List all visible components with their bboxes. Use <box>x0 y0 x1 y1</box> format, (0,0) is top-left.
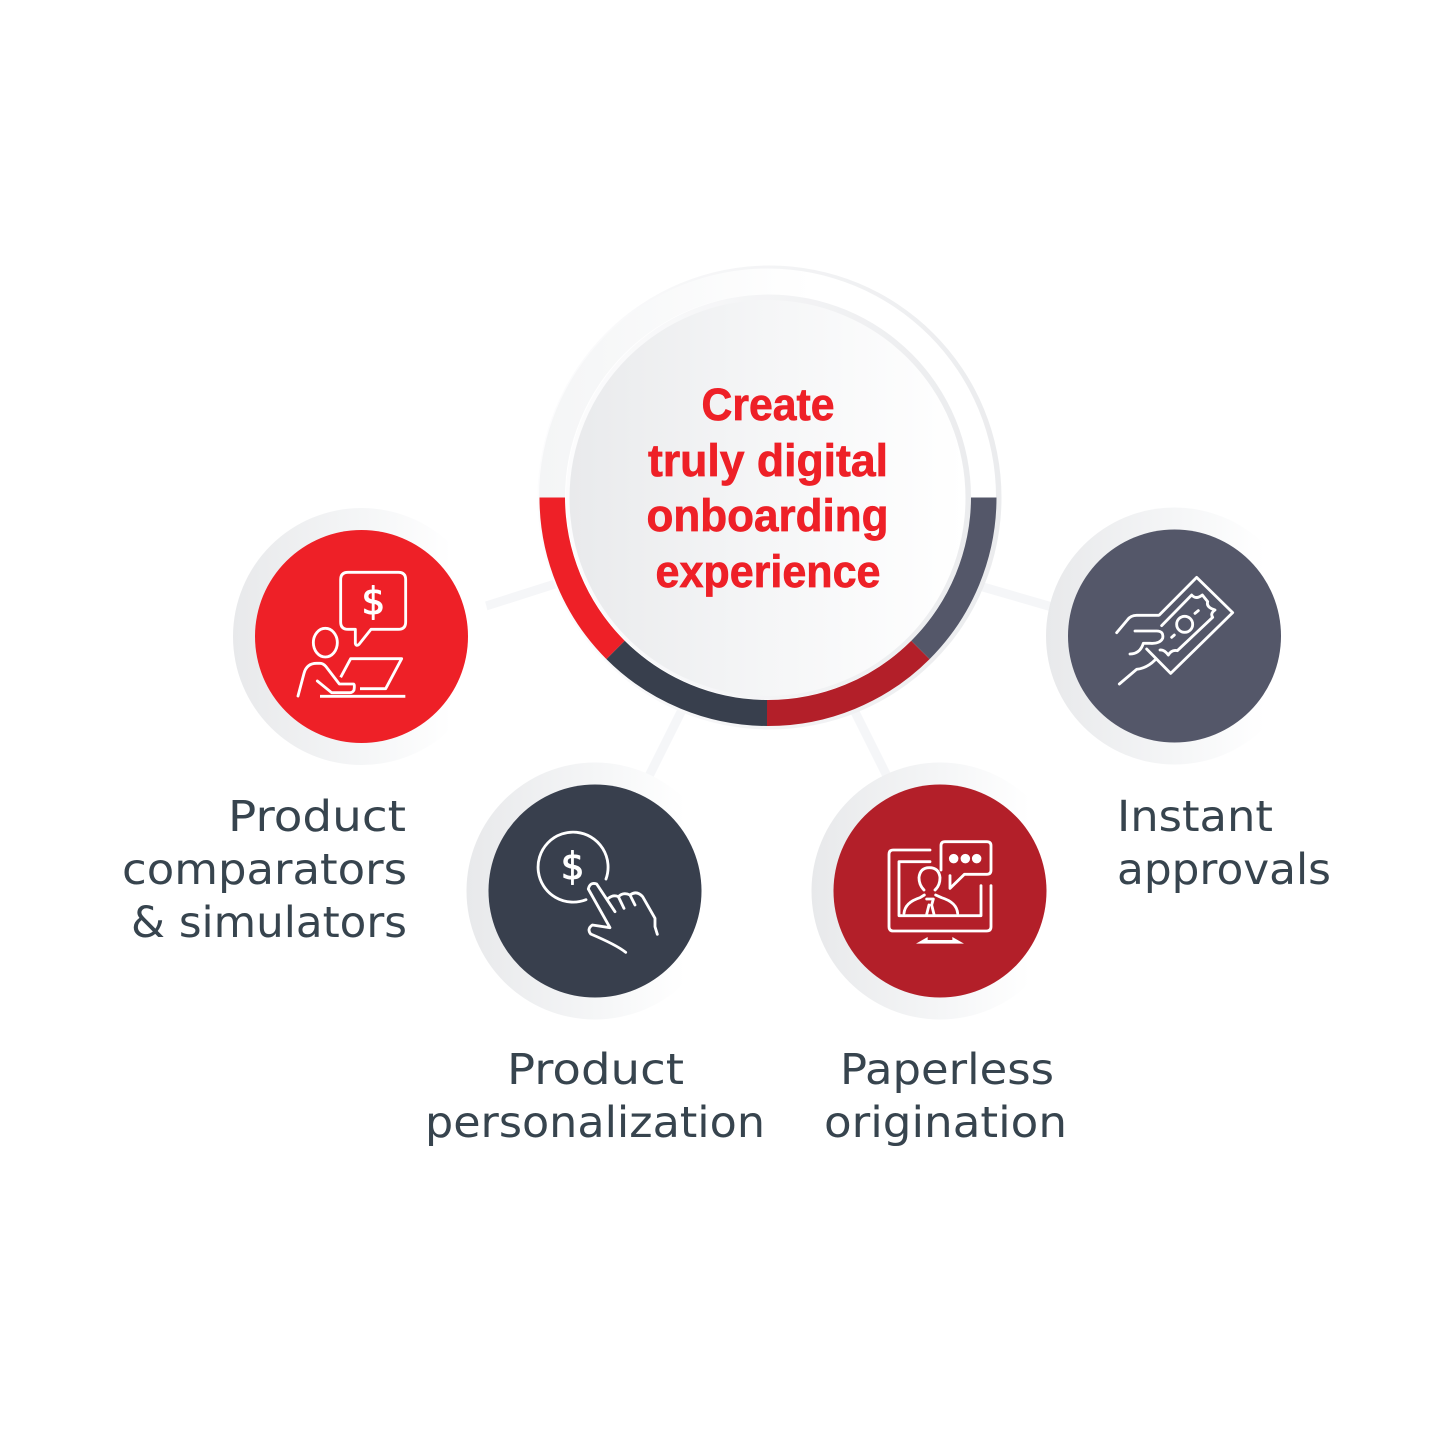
central hub <box>538 266 1002 730</box>
node: product personalization <box>466 762 724 1020</box>
label: product comparators: comparators <box>122 845 407 895</box>
label: product personalization: Product <box>507 1045 684 1095</box>
title: experience <box>656 546 880 597</box>
node: product comparators <box>233 508 490 765</box>
label: product comparators <box>122 792 407 948</box>
title: truly digital <box>648 435 888 486</box>
icon: hand holding banknote <box>1117 577 1233 684</box>
title: Create <box>702 379 834 430</box>
icon: person at laptop with dollar speech bubble: $ <box>361 579 385 623</box>
label: product personalization: personalization <box>425 1098 765 1148</box>
hub ring segments <box>552 498 984 713</box>
node: instant approvals <box>1046 508 1303 764</box>
icon: video call on monitor <box>889 842 991 944</box>
icon: finger tapping dollar coin: $ <box>561 844 585 888</box>
label: product comparators: Product <box>228 792 406 842</box>
label: instant approvals <box>1117 792 1331 895</box>
label: product comparators: & simulators <box>131 898 407 948</box>
connector lines <box>486 584 1052 778</box>
title: onboarding <box>646 490 888 541</box>
label: instant approvals: Instant <box>1117 792 1273 842</box>
node: paperless origination <box>812 762 1068 1020</box>
icon: finger tapping dollar coin <box>538 832 657 952</box>
label: instant approvals: approvals <box>1117 845 1331 895</box>
label: paperless origination: Paperless <box>840 1045 1054 1095</box>
label: paperless origination: origination <box>824 1098 1067 1148</box>
label: paperless origination <box>824 1045 1067 1148</box>
title <box>646 379 888 597</box>
label: product personalization <box>425 1045 765 1148</box>
icon: person at laptop with dollar speech bubble <box>298 572 406 696</box>
